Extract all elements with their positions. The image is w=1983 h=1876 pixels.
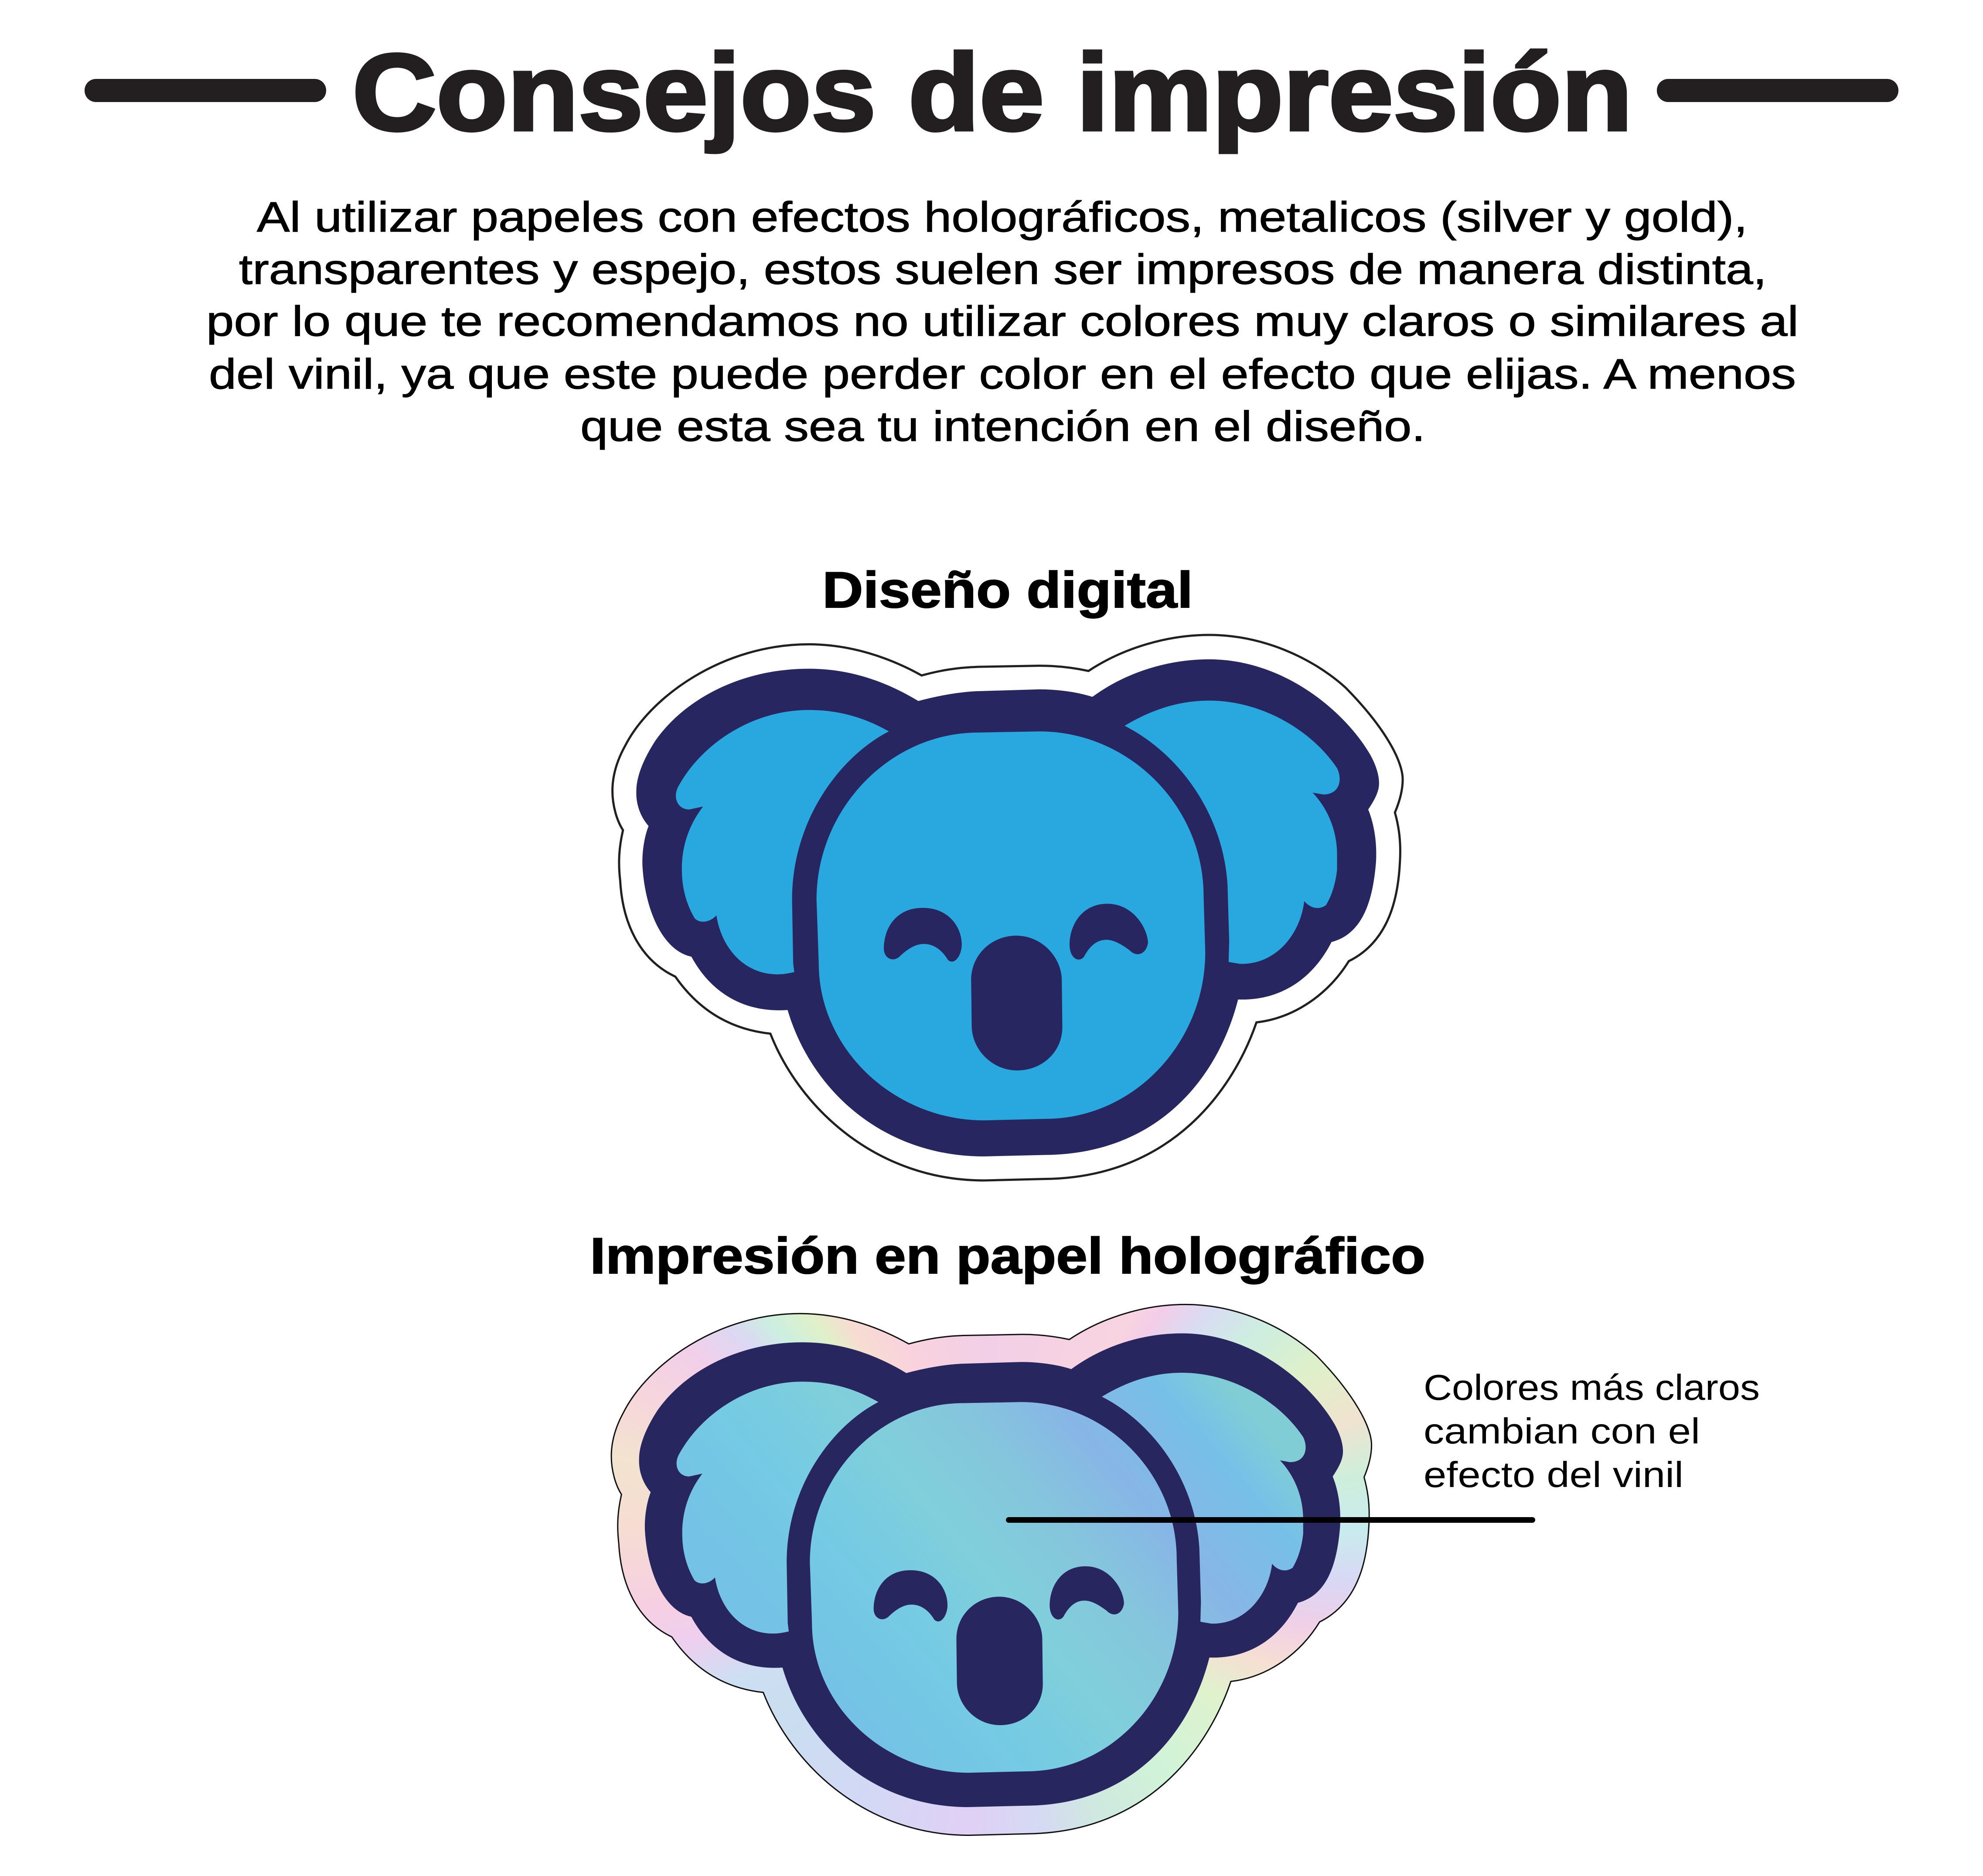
die-cut outline — [613, 635, 1403, 1180]
dark silhouette — [636, 659, 1379, 1156]
koala artwork — [639, 1334, 1343, 1807]
koala sticker: holographic print — [610, 1304, 1373, 1836]
callout text — [1424, 1367, 1760, 1495]
koala sticker: digital design — [613, 635, 1403, 1180]
heading: digital design: Diseño digital — [822, 561, 1193, 618]
intro paragraph: Al utilizar papeles con efectos holográficos, metalicos (silver y gold), — [257, 193, 1748, 241]
intro paragraph: por lo que te recomendamos no utilizar colores muy claros o similares al — [206, 297, 1799, 345]
intro paragraph: del vinil, ya que este puede perder color en el efecto que elijas. A menos — [209, 350, 1796, 398]
intro paragraph: que esta sea tu intención en el diseño. — [580, 402, 1425, 450]
callout text: cambian con el — [1424, 1411, 1700, 1451]
nose — [956, 1597, 1043, 1725]
left eye — [874, 1570, 947, 1621]
title — [85, 31, 1898, 153]
face — [810, 1402, 1178, 1773]
right ear — [1124, 701, 1340, 964]
callout text: efecto del vinil — [1424, 1454, 1683, 1495]
left ear — [677, 1381, 879, 1634]
callout leader line — [1006, 1517, 1535, 1523]
die-cut outline — [611, 1304, 1372, 1835]
nose — [971, 936, 1062, 1071]
face — [817, 731, 1205, 1120]
intro paragraph — [206, 193, 1799, 450]
holographic backing — [612, 1305, 1371, 1835]
left eye — [884, 908, 962, 962]
heading: holographic print: Impresión en papel holográfico — [590, 1227, 1425, 1284]
title text: Consejos de impresión — [352, 31, 1632, 153]
left ear — [676, 710, 889, 974]
right ear — [1102, 1373, 1306, 1624]
left title rule — [85, 79, 326, 102]
right eye — [1049, 1566, 1124, 1620]
intro paragraph: transparentes y espejo, estos suelen ser impresos de manera distinta, — [239, 246, 1767, 293]
right eye — [1070, 904, 1148, 959]
dark silhouette — [639, 1334, 1343, 1807]
callout text: Colores más claros — [1424, 1367, 1760, 1408]
right title rule — [1657, 79, 1898, 102]
